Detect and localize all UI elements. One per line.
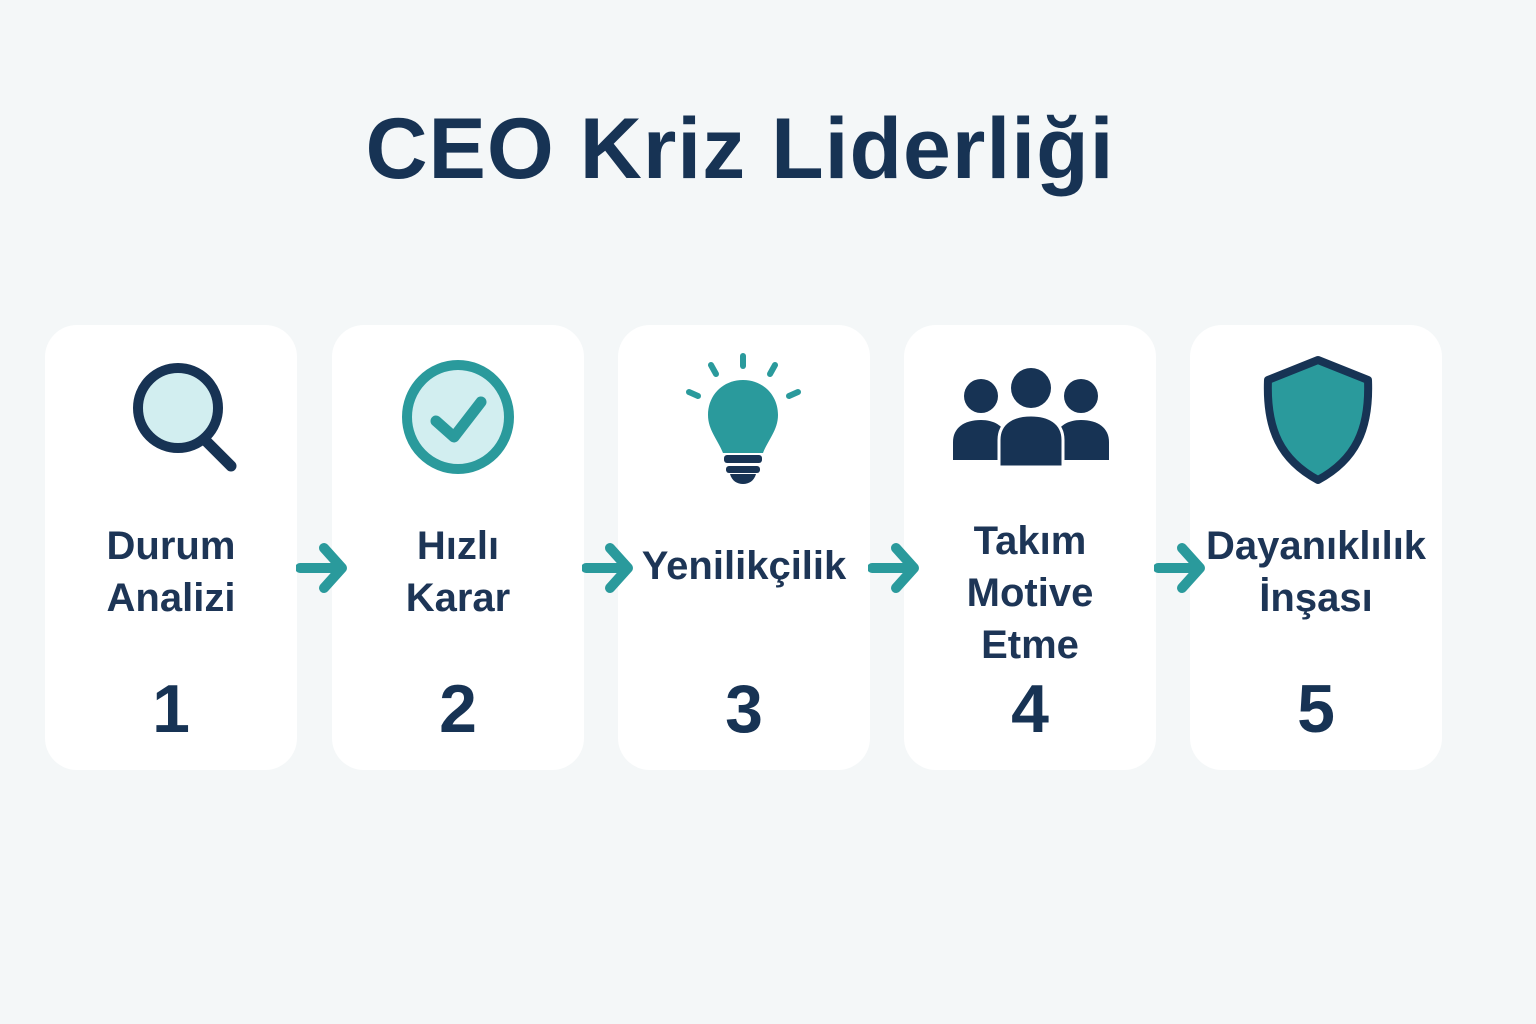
number: 1 <box>152 671 190 747</box>
number: 4 <box>1011 671 1049 747</box>
label: Etme <box>981 623 1079 667</box>
label: Karar <box>406 576 510 620</box>
label <box>967 519 1093 667</box>
card 1 <box>45 325 297 770</box>
label: Durum <box>107 524 235 568</box>
title: CEO Kriz Liderliği <box>365 101 1115 197</box>
label: Analizi <box>107 576 235 620</box>
label: Takım <box>974 519 1086 563</box>
card 4 <box>904 325 1156 770</box>
label <box>406 524 510 620</box>
number: 2 <box>439 671 477 747</box>
icon: magnifier <box>133 363 236 472</box>
label: Motive <box>967 571 1093 615</box>
label <box>107 524 235 620</box>
icon: shield <box>1264 356 1372 484</box>
label: İnşası <box>1259 576 1373 620</box>
arrow 1 <box>296 543 347 593</box>
icon: check circle <box>402 360 514 474</box>
label: Yenilikçilik <box>642 544 846 588</box>
icon: lightbulb <box>686 353 801 484</box>
arrow 4 <box>1154 543 1205 593</box>
card 3 <box>618 325 870 770</box>
arrow 2 <box>582 543 633 593</box>
label <box>1206 524 1426 620</box>
label: Hızlı <box>417 524 499 568</box>
arrow 3 <box>868 543 919 593</box>
card 5 <box>1190 325 1442 770</box>
number: 3 <box>725 671 763 747</box>
label: Dayanıklılık <box>1206 524 1426 568</box>
icon: team <box>953 368 1109 466</box>
number: 5 <box>1297 671 1335 747</box>
card 2 <box>332 325 584 770</box>
